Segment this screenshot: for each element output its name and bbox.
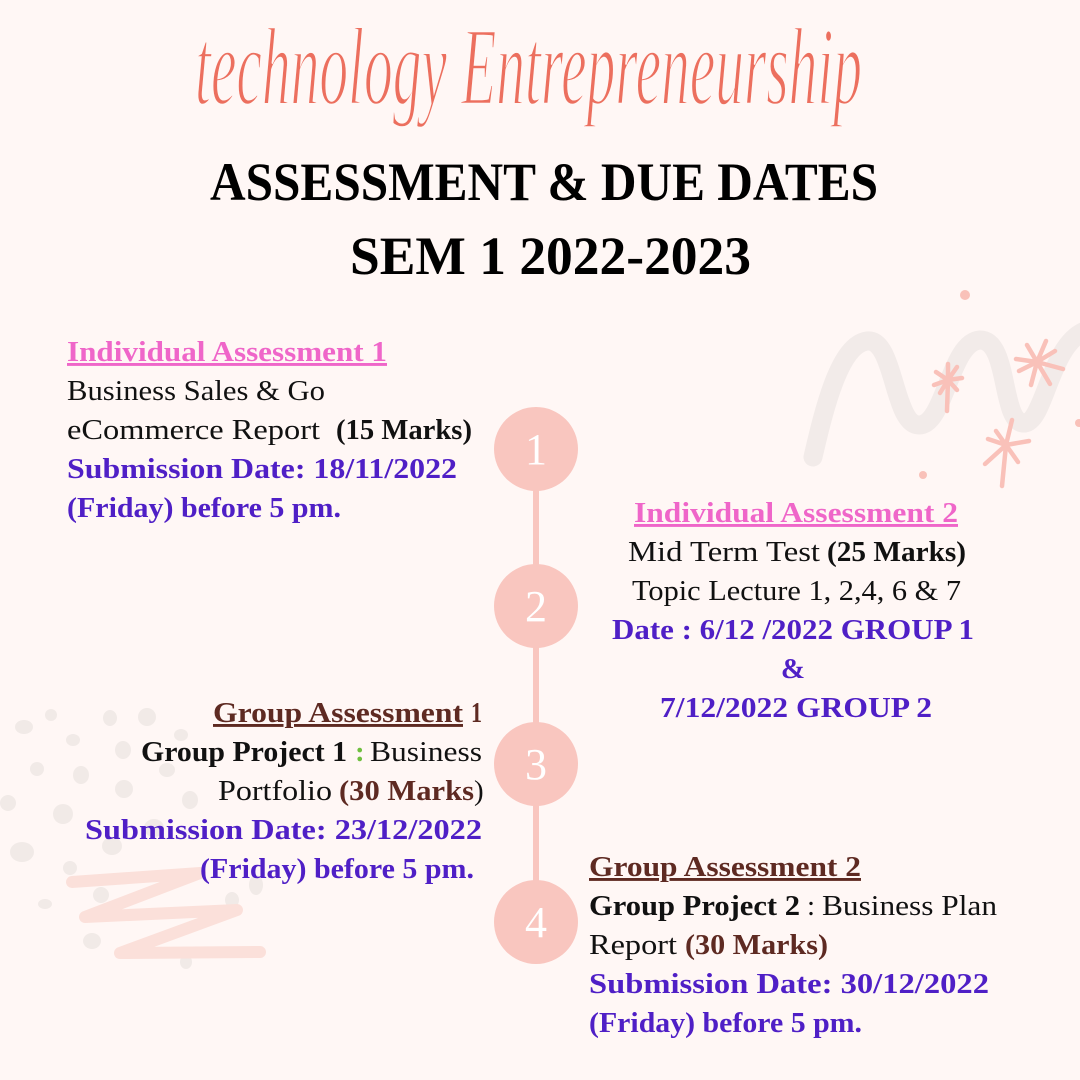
heading: SEM 1 2022-2023: [350, 226, 751, 286]
timeline: [494, 407, 578, 964]
assessment block 1: [67, 336, 472, 524]
script title: technology Entrepreneurship: [195, 6, 862, 129]
assessment block 4: (Friday) before 5 pm.: [589, 1007, 862, 1039]
assessment block 2: 7/12/2022 GROUP 2: [660, 692, 932, 724]
assessment block 3: Group Assessment: [213, 697, 463, 729]
assessment block 3: Group Project 1: [141, 736, 347, 768]
step 3: 3: [525, 740, 547, 789]
assessment block 2: Topic Lecture 1, 2,4, 6 & 7: [632, 575, 961, 607]
assessment block 4: (30 Marks): [685, 929, 828, 961]
assessment block 1: (Friday) before 5 pm.: [67, 492, 341, 524]
assessment block 4: Report: [589, 929, 677, 961]
assessment block 4: Group Assessment 2: [589, 851, 861, 883]
assessment block 4: [589, 851, 998, 1039]
assessment block 2: &: [781, 653, 805, 685]
assessment block 2: Date : 6/12 /2022 GROUP 1: [612, 614, 974, 646]
step 2: 2: [525, 582, 547, 631]
assessment block 3: Business: [370, 736, 482, 768]
step 3: [494, 722, 578, 806]
assessment block 1: eCommerce Report: [67, 414, 320, 446]
decoration: grey dots: [0, 708, 263, 969]
decoration: pink scribble: [72, 873, 260, 953]
step 2: [494, 564, 578, 648]
assessment block 3: Portfolio: [218, 775, 332, 807]
step 1: 1: [525, 425, 547, 474]
assessment block 2: [612, 497, 974, 724]
assessment block 3: Submission Date: 23/12/2022: [85, 814, 482, 846]
assessment block 3: [85, 697, 484, 885]
assessment block 1: Business Sales & Go: [67, 375, 325, 407]
assessment block 1: (15 Marks): [336, 414, 472, 446]
step 4: 4: [525, 898, 547, 947]
step 1: [494, 407, 578, 491]
heading: ASSESSMENT & DUE DATES: [210, 152, 878, 212]
assessment block 4: :: [807, 890, 815, 922]
assessment block 4: Submission Date: 30/12/2022: [589, 968, 989, 1000]
assessment block 3: 1: [471, 697, 482, 729]
assessment block 3: (Friday) before 5 pm.: [200, 853, 474, 885]
assessment block 2: (25 Marks): [827, 536, 966, 568]
assessment block 1: Individual Assessment 1: [67, 336, 387, 368]
decoration: grey squiggle with pink stars: [813, 290, 1080, 486]
step 4: [494, 880, 578, 964]
assessment block 2: Individual Assessment 2: [634, 497, 958, 529]
assessment block 4: Business Plan: [822, 890, 998, 922]
assessment block 3: :: [355, 736, 365, 768]
assessment block 4: Group Project 2: [589, 890, 800, 922]
assessment block 1: Submission Date: 18/11/2022: [67, 453, 457, 485]
heading: [210, 152, 878, 286]
assessment block 3: (30 Marks: [339, 775, 474, 807]
assessment block 3: ): [474, 775, 484, 807]
assessment block 2: Mid Term Test: [628, 536, 820, 568]
